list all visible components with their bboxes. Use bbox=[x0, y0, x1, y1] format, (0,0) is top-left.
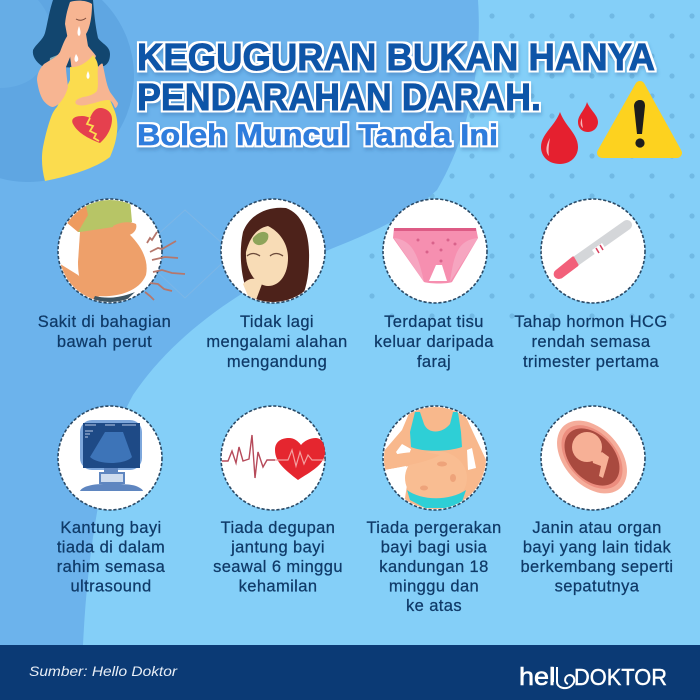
label: item 7: bayi bagi usia bbox=[381, 538, 488, 556]
label: item 7: minggu dan bbox=[389, 578, 479, 596]
label: item 5: Kantung bayi bbox=[60, 519, 162, 537]
label: item 8: bayi yang lain tidak bbox=[523, 538, 672, 556]
title bbox=[137, 37, 655, 152]
label: item 4: rendah semasa bbox=[532, 333, 651, 351]
label: item 5: ultrasound bbox=[70, 578, 152, 596]
hair bbox=[33, 0, 110, 68]
icon: pink underwear bbox=[383, 199, 487, 303]
label: item 6: seawal 6 minggu bbox=[213, 558, 343, 576]
icon: fetus in womb bbox=[541, 406, 645, 510]
logo: hel bbox=[519, 663, 555, 691]
label: item 4: trimester pertama bbox=[523, 353, 659, 371]
pain lines bbox=[145, 232, 185, 300]
label: item 2: mengandung bbox=[227, 353, 327, 371]
label: item 6: Tiada degupan bbox=[221, 519, 335, 537]
label: item 4: Tahap hormon HCG bbox=[514, 313, 668, 331]
right arm on belly bbox=[75, 64, 118, 108]
source text: Sumber: Hello Doktor bbox=[29, 663, 178, 679]
subtitle: Boleh Muncul Tanda Ini bbox=[137, 119, 498, 152]
logo bbox=[519, 663, 667, 691]
label: item 2: Tidak lagi bbox=[240, 313, 314, 331]
footer bar bbox=[0, 645, 700, 700]
icon: pregnancy test bbox=[541, 199, 645, 303]
icon: blood drop small bbox=[578, 102, 598, 132]
label: item 6: kehamilan bbox=[239, 578, 317, 596]
blue strap bbox=[48, 54, 62, 76]
label: item 8: Janin atau organ bbox=[532, 519, 662, 537]
label: item 7: Tiada pergerakan bbox=[366, 519, 502, 537]
label: item 3: Terdapat tisu bbox=[384, 313, 484, 331]
face and chest bbox=[65, 1, 96, 75]
icon: pregnant belly bbox=[383, 404, 487, 512]
icon: heartbeat bbox=[221, 406, 325, 510]
label: item 7: ke atas bbox=[406, 597, 462, 615]
left arm raised to face bbox=[37, 32, 75, 107]
label: item 6: jantung bayi bbox=[230, 538, 325, 556]
label: item 1: Sakit di bahagian bbox=[38, 313, 171, 331]
label: item 8: berkembang seperti bbox=[520, 558, 674, 576]
label: item 3: keluar daripada bbox=[374, 333, 494, 351]
label: item 7: kandungan 18 bbox=[379, 558, 489, 576]
broken heart bbox=[72, 108, 112, 143]
label: item 1: bawah perut bbox=[57, 333, 152, 351]
heart crack bbox=[87, 118, 99, 141]
label: item 5: tiada di dalam bbox=[57, 538, 165, 556]
icon: warning triangle bbox=[602, 86, 677, 153]
title line 1: KEGUGURAN BUKAN HANYA bbox=[137, 37, 655, 79]
closed eye bbox=[76, 18, 86, 20]
icon: nauseous woman bbox=[221, 199, 325, 306]
label: item 2: mengalami alahan bbox=[206, 333, 348, 351]
illustration: crying pregnant woman bbox=[33, 0, 118, 181]
icon: ultrasound machine bbox=[58, 406, 162, 510]
label: item 8: sepatutnya bbox=[555, 578, 640, 596]
tears bbox=[74, 26, 90, 79]
logo: DOKTOR bbox=[574, 664, 667, 690]
title line 2: PENDARAHAN DARAH. bbox=[137, 77, 541, 119]
icon: blood drop large bbox=[541, 112, 578, 164]
label: item 3: faraj bbox=[417, 353, 451, 371]
icon: belly pain bbox=[57, 199, 162, 306]
label: item 5: rahim semasa bbox=[57, 558, 166, 576]
yellow dress bbox=[42, 55, 117, 181]
